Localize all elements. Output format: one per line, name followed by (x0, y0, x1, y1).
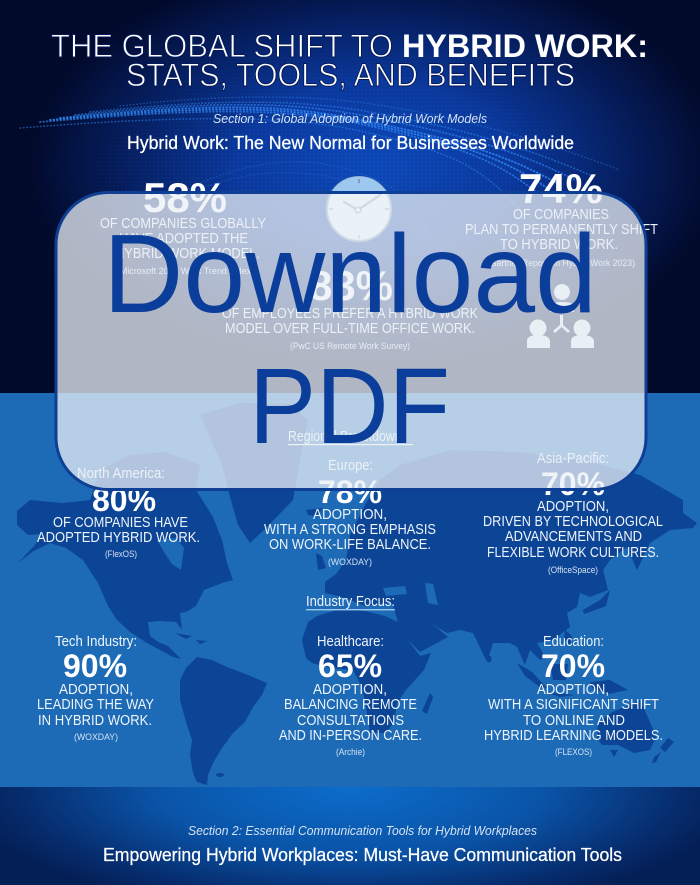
stat: Europe: 78% (318, 474, 382, 510)
stat: North America: 80% (92, 482, 156, 518)
stat: Tech Industry: ADOPTION, (59, 681, 133, 698)
stat: North America: ADOPTED HYBRID WORK. (37, 529, 200, 546)
stat: Europe: Europe: (328, 458, 373, 474)
stat: 58% of companies: OF COMPANIES GLOBALLY (100, 215, 266, 232)
stat: Europe: (WOXDAY) (328, 557, 372, 567)
stat: Education: (FLEXOS) (555, 747, 592, 757)
stat: Europe: ADOPTION, (313, 506, 387, 523)
panel: bottom section background (0, 787, 700, 885)
stat: Healthcare: BALANCING REMOTE (284, 696, 417, 713)
heading: industry focus: Industry Focus: (306, 594, 395, 610)
section 1 label: Section 1: Global Adoption of Hybrid Work Models (213, 111, 487, 126)
callout: download PDF overlay: PDF (249, 345, 450, 466)
stat: 74% of companies: PLAN TO PERMANENTLY SHIFT (465, 221, 658, 238)
map: South America (180, 657, 267, 785)
title: STATS, TOOLS, AND BENEFITS (126, 57, 575, 93)
stat: 83% of employees: 83% (309, 262, 393, 309)
map: Caribbean islands (175, 633, 208, 644)
section 1 heading: Hybrid Work: The New Normal for Businesses Worldwide (127, 133, 574, 153)
stat: Asia-Pacific (483, 451, 663, 575)
map: Caspian and Black Sea (383, 583, 438, 605)
stat: Healthcare: Healthcare: (317, 634, 384, 650)
stat: North America: North America: (77, 466, 165, 482)
stat: Education: WITH A SIGNIFICANT SHIFT (488, 696, 659, 713)
stat: 58% of companies: HAVE ADOPTED THE (119, 230, 248, 247)
stat: Asia-Pacific: FLEXIBLE WORK CULTURES. (487, 544, 659, 561)
stat: Europe: WITH A STRONG EMPHASIS (264, 521, 436, 538)
stat: Europe (264, 458, 436, 567)
stat: Tech Industry: LEADING THE WAY (37, 696, 154, 713)
stat: 74% of companies: 74% (519, 165, 603, 212)
stat: Education (484, 634, 663, 757)
stat: Education: 70% (541, 648, 605, 684)
stat: Tech Industry (37, 634, 154, 742)
stat: Asia-Pacific: DRIVEN BY TECHNOLOGICAL (483, 513, 663, 530)
map: Falkland Islands (216, 773, 224, 777)
stat: Asia-Pacific: ADVANCEMENTS AND (505, 528, 642, 545)
map: Africa (302, 609, 431, 733)
stat: Healthcare: 65% (318, 648, 382, 684)
stat: Education: HYBRID LEARNING MODELS. (484, 727, 663, 744)
title (51, 28, 648, 93)
map: Indonesia (517, 663, 628, 697)
stat: Healthcare: AND IN-PERSON CARE. (279, 727, 422, 744)
panel: world map section background (0, 393, 700, 787)
stat: Education: TO ONLINE AND (523, 712, 625, 729)
title: THE GLOBAL SHIFT TO (51, 28, 393, 64)
stat: 74% of companies: (Gartner Report on Hybrid Work 2023) (487, 258, 635, 268)
section 2 heading: Empowering Hybrid Workplaces: Must-Have Communication Tools (103, 844, 622, 865)
stat: Healthcare: ADOPTION, (313, 681, 387, 698)
stat: 83% of employees (222, 262, 478, 351)
stat: Healthcare: CONSULTATIONS (297, 712, 404, 729)
stat: North America (37, 466, 200, 559)
heading: regional breakdown: Regional Breakdown: (288, 429, 405, 445)
map: Madagascar (422, 693, 433, 714)
stat: 83% of employees: OF EMPLOYEES PREFER A HYBRID WORK (222, 305, 478, 322)
stat: Asia-Pacific: (OfficeSpace) (548, 565, 598, 575)
map: Sri Lanka (486, 656, 492, 662)
stat: Education: ADOPTION, (537, 681, 609, 698)
map: Japan and Philippines (564, 590, 610, 645)
stat: Healthcare: (Archie) (336, 747, 365, 757)
map: Hudson Bay (157, 538, 184, 570)
stat: 83% of employees: MODEL OVER FULL-TIME OFFICE WORK. (225, 320, 475, 337)
stat: Asia-Pacific: Asia-Pacific: (537, 451, 609, 467)
stat: 74% of companies: OF COMPANIES (513, 206, 609, 223)
stat: North America: (FlexOS) (105, 549, 137, 559)
stat: 83% of employees: (PwC US Remote Work Survey) (290, 341, 410, 351)
title: HYBRID WORK: (402, 28, 648, 64)
stat: 74% of companies: TO HYBRID WORK. (500, 236, 618, 253)
stat: Tech Industry: (WOXDAY) (74, 732, 118, 742)
stat: Asia-Pacific: 70% (541, 466, 605, 502)
stat: Europe: ON WORK-LIFE BALANCE. (269, 536, 431, 553)
map: Greenland (200, 403, 308, 543)
icon: clock (327, 176, 391, 241)
stat: Tech Industry: IN HYBRID WORK. (38, 712, 152, 729)
stat: Tech Industry: Tech Industry: (55, 634, 137, 650)
callout: download PDF overlay: Download (103, 212, 597, 336)
icon: connected people (527, 284, 594, 348)
stat: 74% of companies (465, 165, 658, 268)
map: Eurasia (325, 450, 697, 665)
map: North America (17, 452, 233, 659)
stat: Tech Industry: 90% (63, 648, 127, 684)
panel: dark header background (19, 0, 700, 346)
stat: 58% of companies (100, 174, 266, 276)
map: Iceland and Britain (306, 508, 326, 570)
map: Australia (597, 700, 656, 753)
stat: Education: Education: (543, 634, 604, 650)
world map (17, 403, 697, 785)
stat: 58% of companies: HYBRID WORK MODEL. (115, 245, 260, 262)
stat: 58% of companies: (Microsoft 2023 Work Trend Index) (117, 266, 254, 276)
map: Tasmania and New Zealand (610, 738, 674, 763)
stat: Asia-Pacific: ADOPTION, (537, 498, 609, 515)
callout: download PDF overlay (56, 192, 646, 490)
section 2 label: Section 2: Essential Communication Tools for Hybrid Workplaces (188, 823, 537, 838)
stat: Healthcare (279, 634, 422, 757)
stat: North America: OF COMPANIES HAVE (53, 514, 188, 531)
stat: 58% of companies: 58% (143, 174, 227, 221)
